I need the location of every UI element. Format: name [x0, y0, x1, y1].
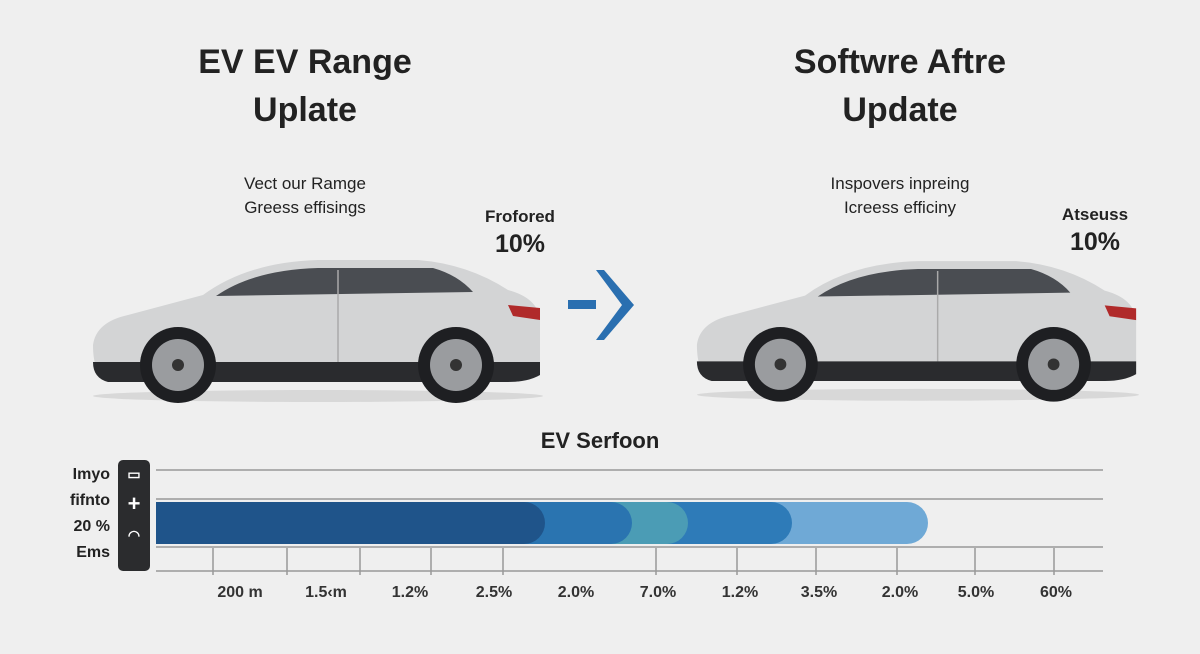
row labels: Imyo — [73, 466, 110, 483]
bar chart: 200 m — [217, 584, 263, 601]
bar chart: 5.0% — [958, 584, 994, 601]
title: right: Update — [842, 91, 958, 129]
car: right — [696, 261, 1139, 402]
subtext: left: Greess effisings — [244, 198, 366, 217]
chart title: EV Serfoon — [541, 428, 659, 453]
bar chart: 2.0% — [882, 584, 918, 601]
subtext: right: Icreess efficiny — [844, 198, 956, 217]
row labels: Ems — [76, 544, 110, 561]
title: right: Softwre Aftre — [794, 43, 1006, 81]
car: left — [93, 260, 543, 403]
bar chart: 2.5% — [476, 584, 512, 601]
arrow — [568, 270, 634, 340]
icon panel: ▭ — [127, 466, 141, 482]
icon panel: ◠ — [128, 527, 140, 543]
row labels — [70, 466, 110, 561]
bar chart: 60% — [1040, 584, 1072, 601]
bar chart: 1.2% — [392, 584, 428, 601]
icon panel: + — [128, 491, 140, 516]
bar chart: 1.2% — [722, 584, 758, 601]
subtext: left — [244, 174, 366, 217]
icon panel — [118, 460, 150, 571]
title: left — [198, 43, 412, 129]
callout: left — [485, 207, 555, 258]
callout: right: 10% — [1070, 228, 1120, 256]
bar chart: 2.0% — [558, 584, 594, 601]
title: left: EV EV Range — [198, 43, 412, 81]
callout: left: Frofored — [485, 207, 555, 226]
title: right — [794, 43, 1006, 129]
callout: right — [1062, 205, 1128, 256]
title: left: Uplate — [253, 91, 357, 129]
subtext: left: Vect our Ramge — [244, 174, 366, 193]
bar chart: 1.5‹m — [305, 584, 347, 601]
bar chart: 7.0% — [640, 584, 676, 601]
callout: left: 10% — [495, 230, 545, 258]
subtext: right — [831, 174, 969, 217]
callout: right: Atseuss — [1062, 205, 1128, 224]
row labels: 20 % — [74, 518, 110, 535]
subtext: right: Inspovers inpreing — [831, 174, 969, 193]
row labels: fifnto — [70, 492, 110, 509]
bar chart: 3.5% — [801, 584, 837, 601]
